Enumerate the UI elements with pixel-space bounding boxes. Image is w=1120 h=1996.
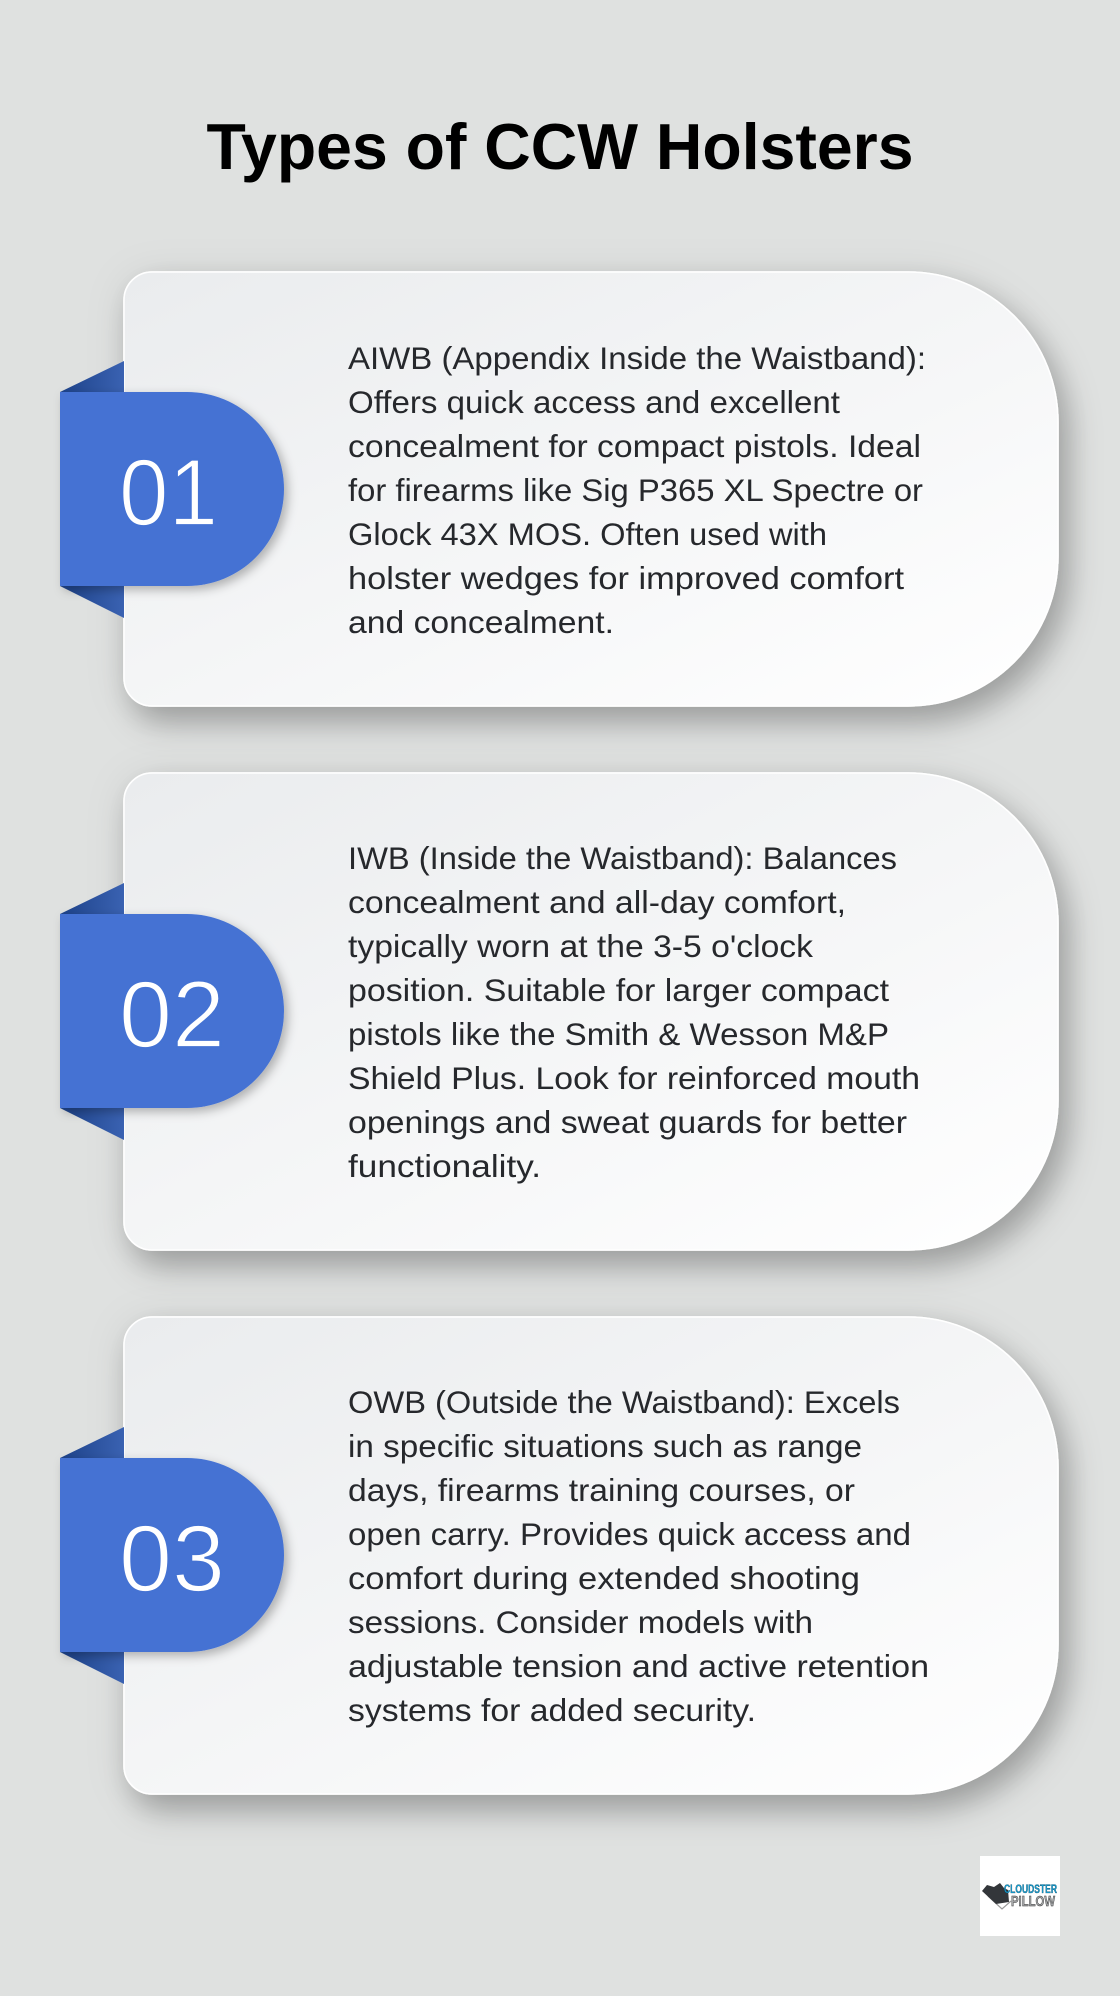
number badge 01: 01	[119, 440, 218, 546]
text: IWB description: openings and sweat guards for better	[348, 1104, 907, 1140]
text: OWB description: in specific situations such as range	[348, 1428, 862, 1464]
number badge 01	[60, 392, 284, 586]
ribbon folds	[60, 883, 124, 1140]
text: IWB description: typically worn at the 3-5 o'clock	[348, 928, 813, 964]
text: AIWB description: and concealment.	[348, 604, 614, 640]
text: OWB description: comfort during extended shooting	[348, 1560, 860, 1596]
text: AIWB description: Offers quick access and excellent	[348, 384, 840, 420]
panel: OWB card	[60, 1317, 1058, 1794]
text: AIWB description: holster wedges for improved comfort	[348, 560, 904, 596]
text: IWB description	[348, 840, 920, 1184]
text: IWB description: pistols like the Smith & Wesson M&P	[348, 1016, 889, 1052]
text: AIWB description: for firearms like Sig P365 XL Spectre or	[348, 472, 923, 508]
text: OWB description	[348, 1384, 929, 1728]
text: IWB description: functionality.	[348, 1148, 541, 1184]
logo: Cloudster Pillow: CLOUDSTER	[1004, 1884, 1058, 1896]
text: OWB description: sessions. Consider models with	[348, 1604, 813, 1640]
text: AIWB description	[348, 340, 926, 640]
number badge 02	[60, 914, 284, 1108]
text: IWB description: IWB (Inside the Waistband): Balances	[348, 840, 897, 876]
text: AIWB description: Glock 43X MOS. Often used with	[348, 516, 827, 552]
card background	[124, 773, 1058, 1250]
text: IWB description: position. Suitable for larger compact	[348, 972, 889, 1008]
title: Types of CCW Holsters	[206, 110, 914, 183]
text: OWB description: open carry. Provides quick access and	[348, 1516, 911, 1552]
text: OWB description: systems for added security.	[348, 1692, 756, 1728]
ribbon folds	[60, 1427, 124, 1684]
text: OWB description: days, firearms training courses, or	[348, 1472, 855, 1508]
number badge 03: 03	[119, 1506, 225, 1612]
logo: Cloudster Pillow: PILLOW	[1011, 1893, 1056, 1910]
logo: Cloudster Pillow	[980, 1856, 1060, 1936]
panel: IWB card	[60, 773, 1058, 1250]
text: AIWB description: concealment for compact pistols. Ideal	[348, 428, 921, 464]
card background	[124, 272, 1058, 706]
text: AIWB description: AIWB (Appendix Inside the Waistband):	[348, 340, 926, 376]
text: IWB description: concealment and all-day comfort,	[348, 884, 846, 920]
ribbon folds	[60, 361, 124, 618]
text: OWB description: OWB (Outside the Waistband): Excels	[348, 1384, 900, 1420]
text: OWB description: adjustable tension and active retention	[348, 1648, 929, 1684]
number badge 02: 02	[119, 962, 225, 1068]
text: IWB description: Shield Plus. Look for reinforced mouth	[348, 1060, 920, 1096]
number badge 03	[60, 1458, 284, 1652]
card background	[124, 1317, 1058, 1794]
panel: AIWB card	[60, 272, 1058, 706]
